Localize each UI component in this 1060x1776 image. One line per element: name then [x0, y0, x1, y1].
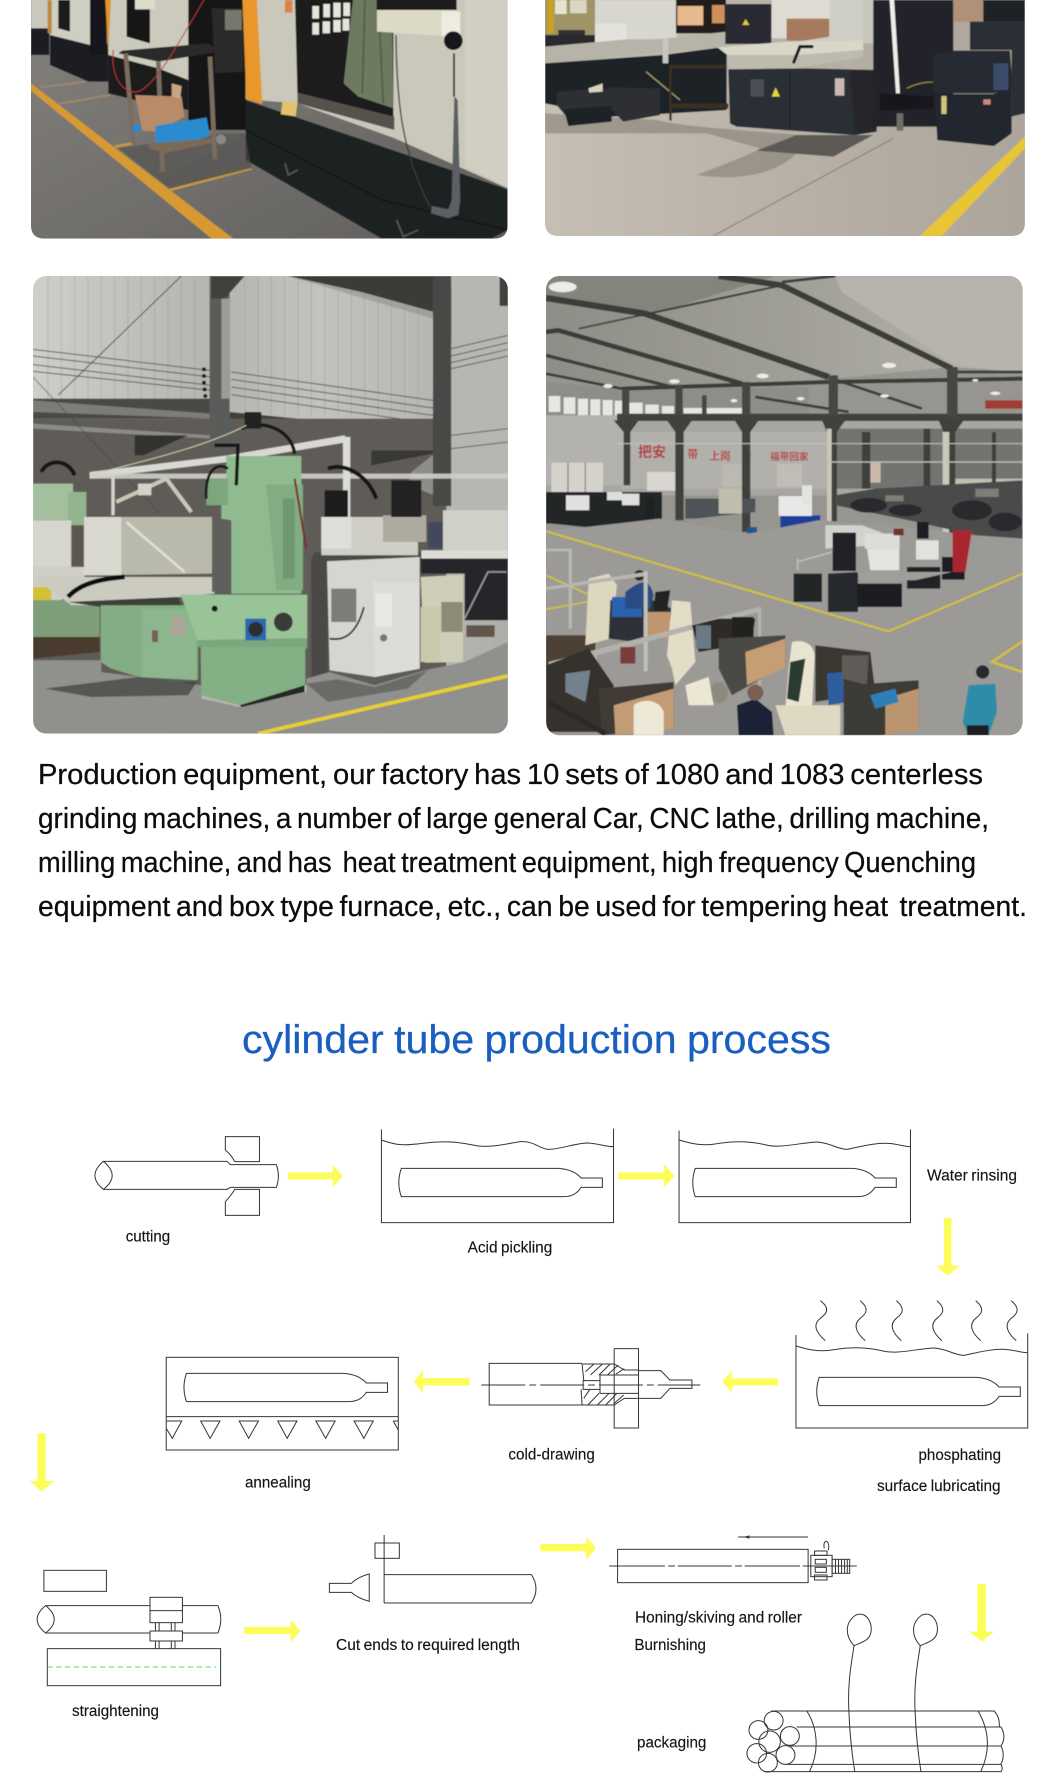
- diagram: honing and roller burnishing: [609, 1535, 857, 1583]
- photo: green grinding machine: [28, 272, 515, 739]
- photo: factory hall overview: 幸: [742, 448, 751, 462]
- diagram: cut ends to length: [329, 1535, 536, 1603]
- photo: CNC machines and cart: [25, 0, 515, 243]
- arrow: phosphating to cold-drawing: [722, 1371, 778, 1393]
- label: Water rinsing: Water rinsing: [927, 1168, 1017, 1185]
- diagram: cold-drawing die: [481, 1349, 700, 1428]
- arrow: cutting to acid pickling: [288, 1165, 343, 1187]
- paragraph: production equipment description: Production equipment, our factory has 10 sets of 1080 and 1083 centerless: [38, 759, 983, 791]
- label: Acid pickling: Acid pickling: [468, 1240, 552, 1257]
- label: packaging: packaging: [637, 1734, 706, 1751]
- process diagrams, row three and packaging: [37, 1535, 1004, 1772]
- label: straightening: straightening: [72, 1703, 159, 1720]
- process diagrams, rows one and two: [30, 1129, 1028, 1492]
- photo: factory hall overview: 上岗: [709, 448, 731, 463]
- label: cold-drawing: cold-drawing: [508, 1446, 595, 1463]
- photo: factory hall overview: 把安: [638, 442, 666, 462]
- paragraph: production equipment description: milling machine, and has heat treatment equipment, high frequency Quenching: [38, 847, 976, 879]
- arrow: honing to packaging: [970, 1584, 994, 1642]
- arrow: water rinsing to phosphating: [936, 1218, 960, 1276]
- diagram: acid pickling bath: [381, 1129, 614, 1223]
- diagram: cutting: [95, 1137, 278, 1215]
- label: cutting: cutting: [126, 1229, 170, 1246]
- paragraph: production equipment description: [38, 759, 1027, 923]
- diagram: annealing furnace: [166, 1357, 398, 1450]
- photo: factory hall overview: [542, 272, 1029, 739]
- paragraph: production equipment description: equipment and box type furnace, etc., can be used for tempering heat treatment.: [38, 891, 1027, 923]
- label: Honing/skiving and roller: Honing/skiving and roller: [635, 1610, 802, 1627]
- arrow: annealing to straightening: [30, 1433, 54, 1492]
- photo: machines with light concrete floor: [540, 0, 1030, 240]
- arrow: acid pickling to water rinsing: [618, 1164, 674, 1187]
- label: phosphating: phosphating: [918, 1447, 1001, 1464]
- diagram: water rinsing bath: [679, 1129, 910, 1223]
- label: Burnishing: Burnishing: [634, 1637, 706, 1654]
- arrow: cut ends to honing: [541, 1536, 596, 1560]
- photo: factory hall overview: 带: [687, 447, 698, 462]
- title: cylinder tube production process: cylinder tube production process: [242, 1018, 831, 1062]
- diagram: phosphating bath with steam: [796, 1301, 1028, 1428]
- photo: factory hall overview: 福带回家: [770, 449, 809, 463]
- label: surface lubricating: surface lubricating: [877, 1478, 1001, 1495]
- diagram: packaged tube bundle with tags: [747, 1614, 1004, 1772]
- paragraph: production equipment description: grinding machines, a number of large general Car, CNC lathe, drilling machine,: [38, 803, 989, 835]
- label: annealing: annealing: [245, 1475, 311, 1492]
- diagram: straightening: [37, 1570, 221, 1686]
- arrow: cold-drawing to annealing: [414, 1370, 470, 1393]
- label: Cut ends to required length: Cut ends to required length: [336, 1637, 520, 1654]
- arrow: straightening to cut ends: [244, 1619, 300, 1643]
